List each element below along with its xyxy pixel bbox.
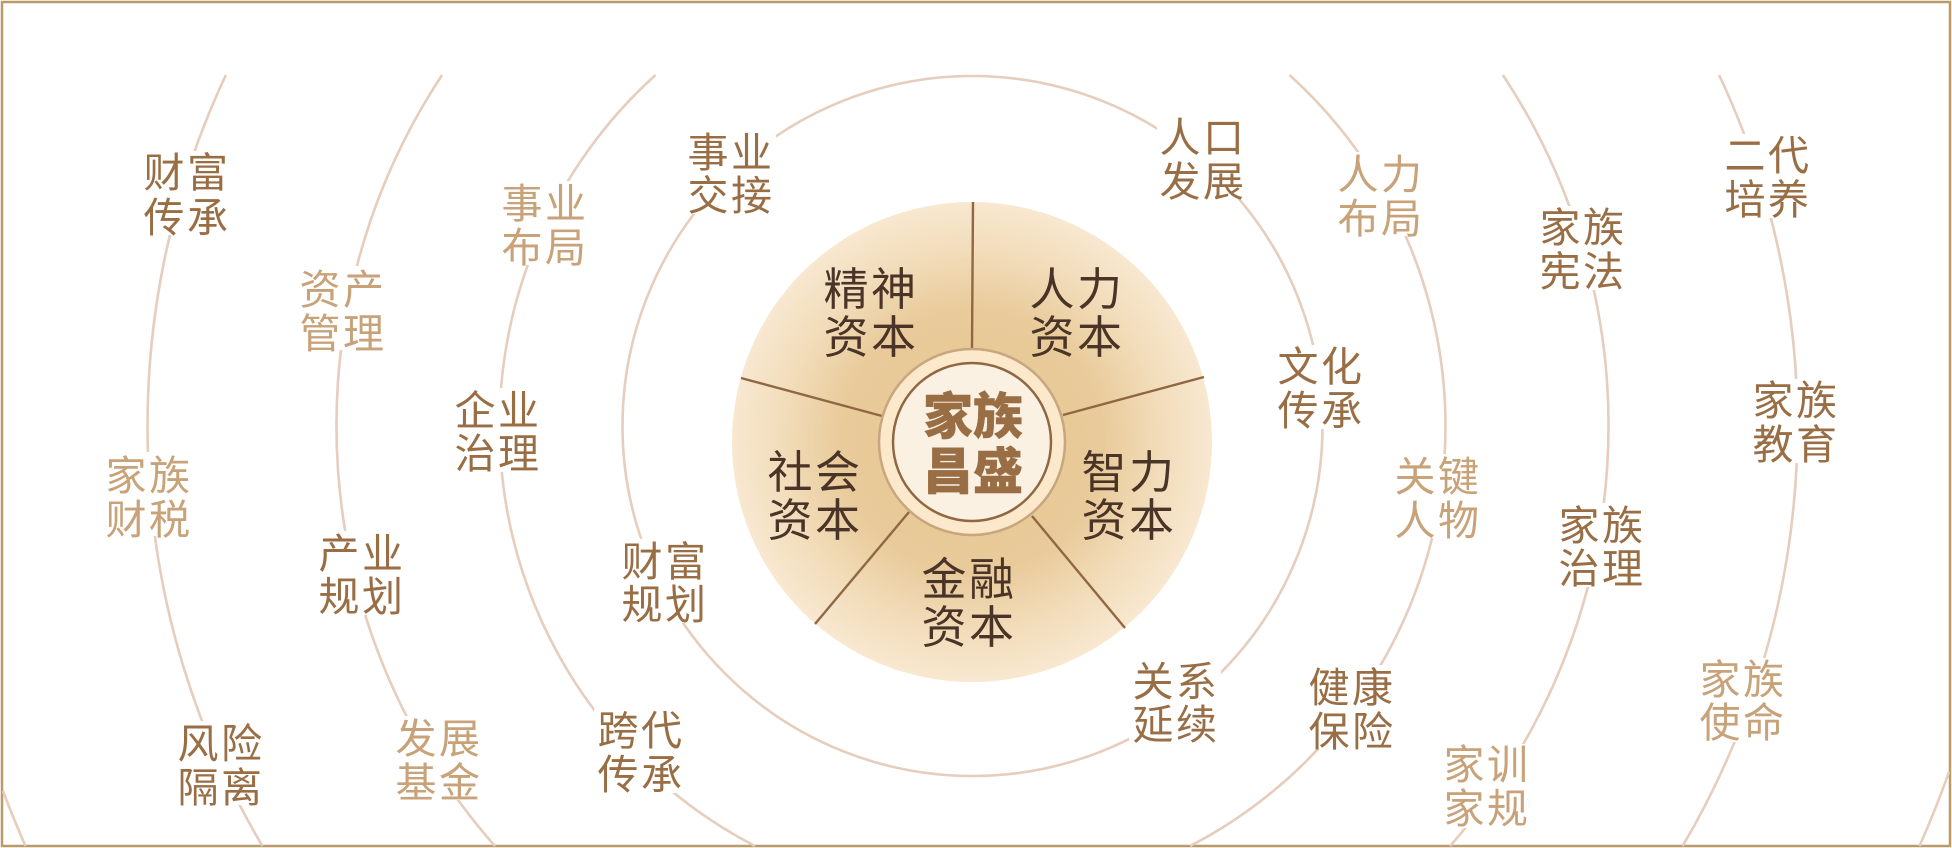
label: 财富规划 <box>618 539 710 628</box>
label: 事业布局: 布局 <box>502 225 588 271</box>
label: 家族治理: 治理 <box>1558 546 1646 592</box>
label: 财富传承: 传承 <box>144 195 230 241</box>
label: 关键人物 <box>1391 454 1483 544</box>
label: 二代培养: 二代 <box>1724 133 1812 179</box>
label: 跨代传承: 传承 <box>598 752 684 798</box>
label: 健康保险: 保险 <box>1308 709 1396 755</box>
label: 文化传承: 文化 <box>1278 344 1364 390</box>
label: 关键人物: 人物 <box>1394 498 1482 544</box>
label: 事业交接 <box>684 130 776 219</box>
label: 发展基金: 基金 <box>396 760 482 806</box>
label: 财富传承: 财富 <box>144 150 230 196</box>
hub title: 家族 <box>923 389 1023 445</box>
label: 关系延续: 关系 <box>1132 659 1220 705</box>
label: 关系延续: 延续 <box>1132 702 1220 748</box>
hub outer ring <box>879 349 1065 535</box>
label: 企业治理: 企业 <box>454 388 542 434</box>
label: 家族教育 <box>1749 378 1841 468</box>
label: 事业布局 <box>498 181 590 271</box>
label: 关键人物: 关键 <box>1394 454 1482 500</box>
label: 家族治理 <box>1556 503 1648 592</box>
label: 事业交接: 事业 <box>688 130 774 176</box>
segment: 社会资本: 资本 <box>767 495 863 546</box>
label: 家族宪法 <box>1537 205 1629 295</box>
label: 健康保险: 健康 <box>1308 665 1396 711</box>
label: 人力布局: 人力 <box>1338 152 1424 198</box>
wheel disc <box>732 202 1212 682</box>
label: 风险隔离 <box>174 721 266 811</box>
label: 产业规划: 产业 <box>318 531 406 577</box>
label: 家族财税: 财税 <box>106 497 192 543</box>
label: 资产管理: 资产 <box>300 267 386 313</box>
label: 事业交接: 交接 <box>688 173 774 219</box>
label: 资产管理 <box>296 266 388 357</box>
label: 财富规划: 规划 <box>622 582 708 628</box>
segment: 智力资本: 资本 <box>1081 495 1177 546</box>
segment: 精神资本: 资本 <box>823 312 919 363</box>
label: 人口发展: 发展 <box>1160 159 1246 205</box>
label: 企业治理: 治理 <box>454 431 542 477</box>
label: 家族财税: 家族 <box>106 453 192 499</box>
label: 产业规划: 规划 <box>318 574 406 620</box>
label: 家族使命 <box>1696 657 1788 746</box>
label: 人口发展: 人口 <box>1160 115 1246 161</box>
segment: 人力资本: 资本 <box>1029 312 1125 363</box>
label: 文化传承 <box>1275 344 1367 434</box>
label: 风险隔离: 隔离 <box>178 765 264 811</box>
label: 家族治理: 家族 <box>1558 503 1646 549</box>
label: 财富规划: 财富 <box>622 539 708 585</box>
label: 家训家规: 家规 <box>1444 786 1530 832</box>
label: 人力布局 <box>1334 152 1426 242</box>
segment: 金融资本: 资本 <box>921 602 1017 653</box>
segment: 精神资本: 精神 <box>823 264 919 315</box>
label: 事业布局: 事业 <box>502 181 588 227</box>
label: 家族宪法: 家族 <box>1540 205 1626 251</box>
label: 家训家规 <box>1441 742 1533 832</box>
label: 发展基金: 发展 <box>396 716 482 762</box>
label: 二代培养: 培养 <box>1724 177 1812 223</box>
label: 家族教育: 家族 <box>1752 378 1840 424</box>
label: 关系延续 <box>1129 659 1221 748</box>
label: 跨代传承: 跨代 <box>598 708 684 754</box>
segment: 人力资本: 人力 <box>1029 264 1125 315</box>
label: 文化传承: 传承 <box>1278 388 1364 434</box>
label: 家族使命: 家族 <box>1700 657 1786 703</box>
label: 家训家规: 家训 <box>1444 742 1530 788</box>
label: 财富传承 <box>140 150 232 241</box>
label: 企业治理 <box>451 388 543 477</box>
label: 家族财税 <box>102 452 194 543</box>
segment: 智力资本: 智力 <box>1081 447 1177 498</box>
label: 健康保险 <box>1305 665 1397 755</box>
label: 资产管理: 管理 <box>300 311 386 357</box>
spokes <box>741 202 1204 628</box>
label: 家族教育: 教育 <box>1752 422 1840 468</box>
hub title: 昌盛 <box>923 444 1023 500</box>
label: 风险隔离: 风险 <box>178 721 264 767</box>
label: 跨代传承 <box>594 708 686 798</box>
label: 发展基金 <box>392 716 484 806</box>
label: 人口发展 <box>1157 115 1249 205</box>
label: 二代培养 <box>1721 133 1813 223</box>
label: 产业规划 <box>315 531 407 620</box>
hub inner circle <box>893 363 1051 521</box>
central wheel <box>732 202 1212 682</box>
label: 家族宪法: 宪法 <box>1540 249 1626 295</box>
segment: 社会资本: 社会 <box>767 447 863 498</box>
segment: 金融资本: 金融 <box>921 554 1017 605</box>
label: 人力布局: 布局 <box>1338 196 1424 242</box>
label: 家族使命: 使命 <box>1700 700 1786 746</box>
